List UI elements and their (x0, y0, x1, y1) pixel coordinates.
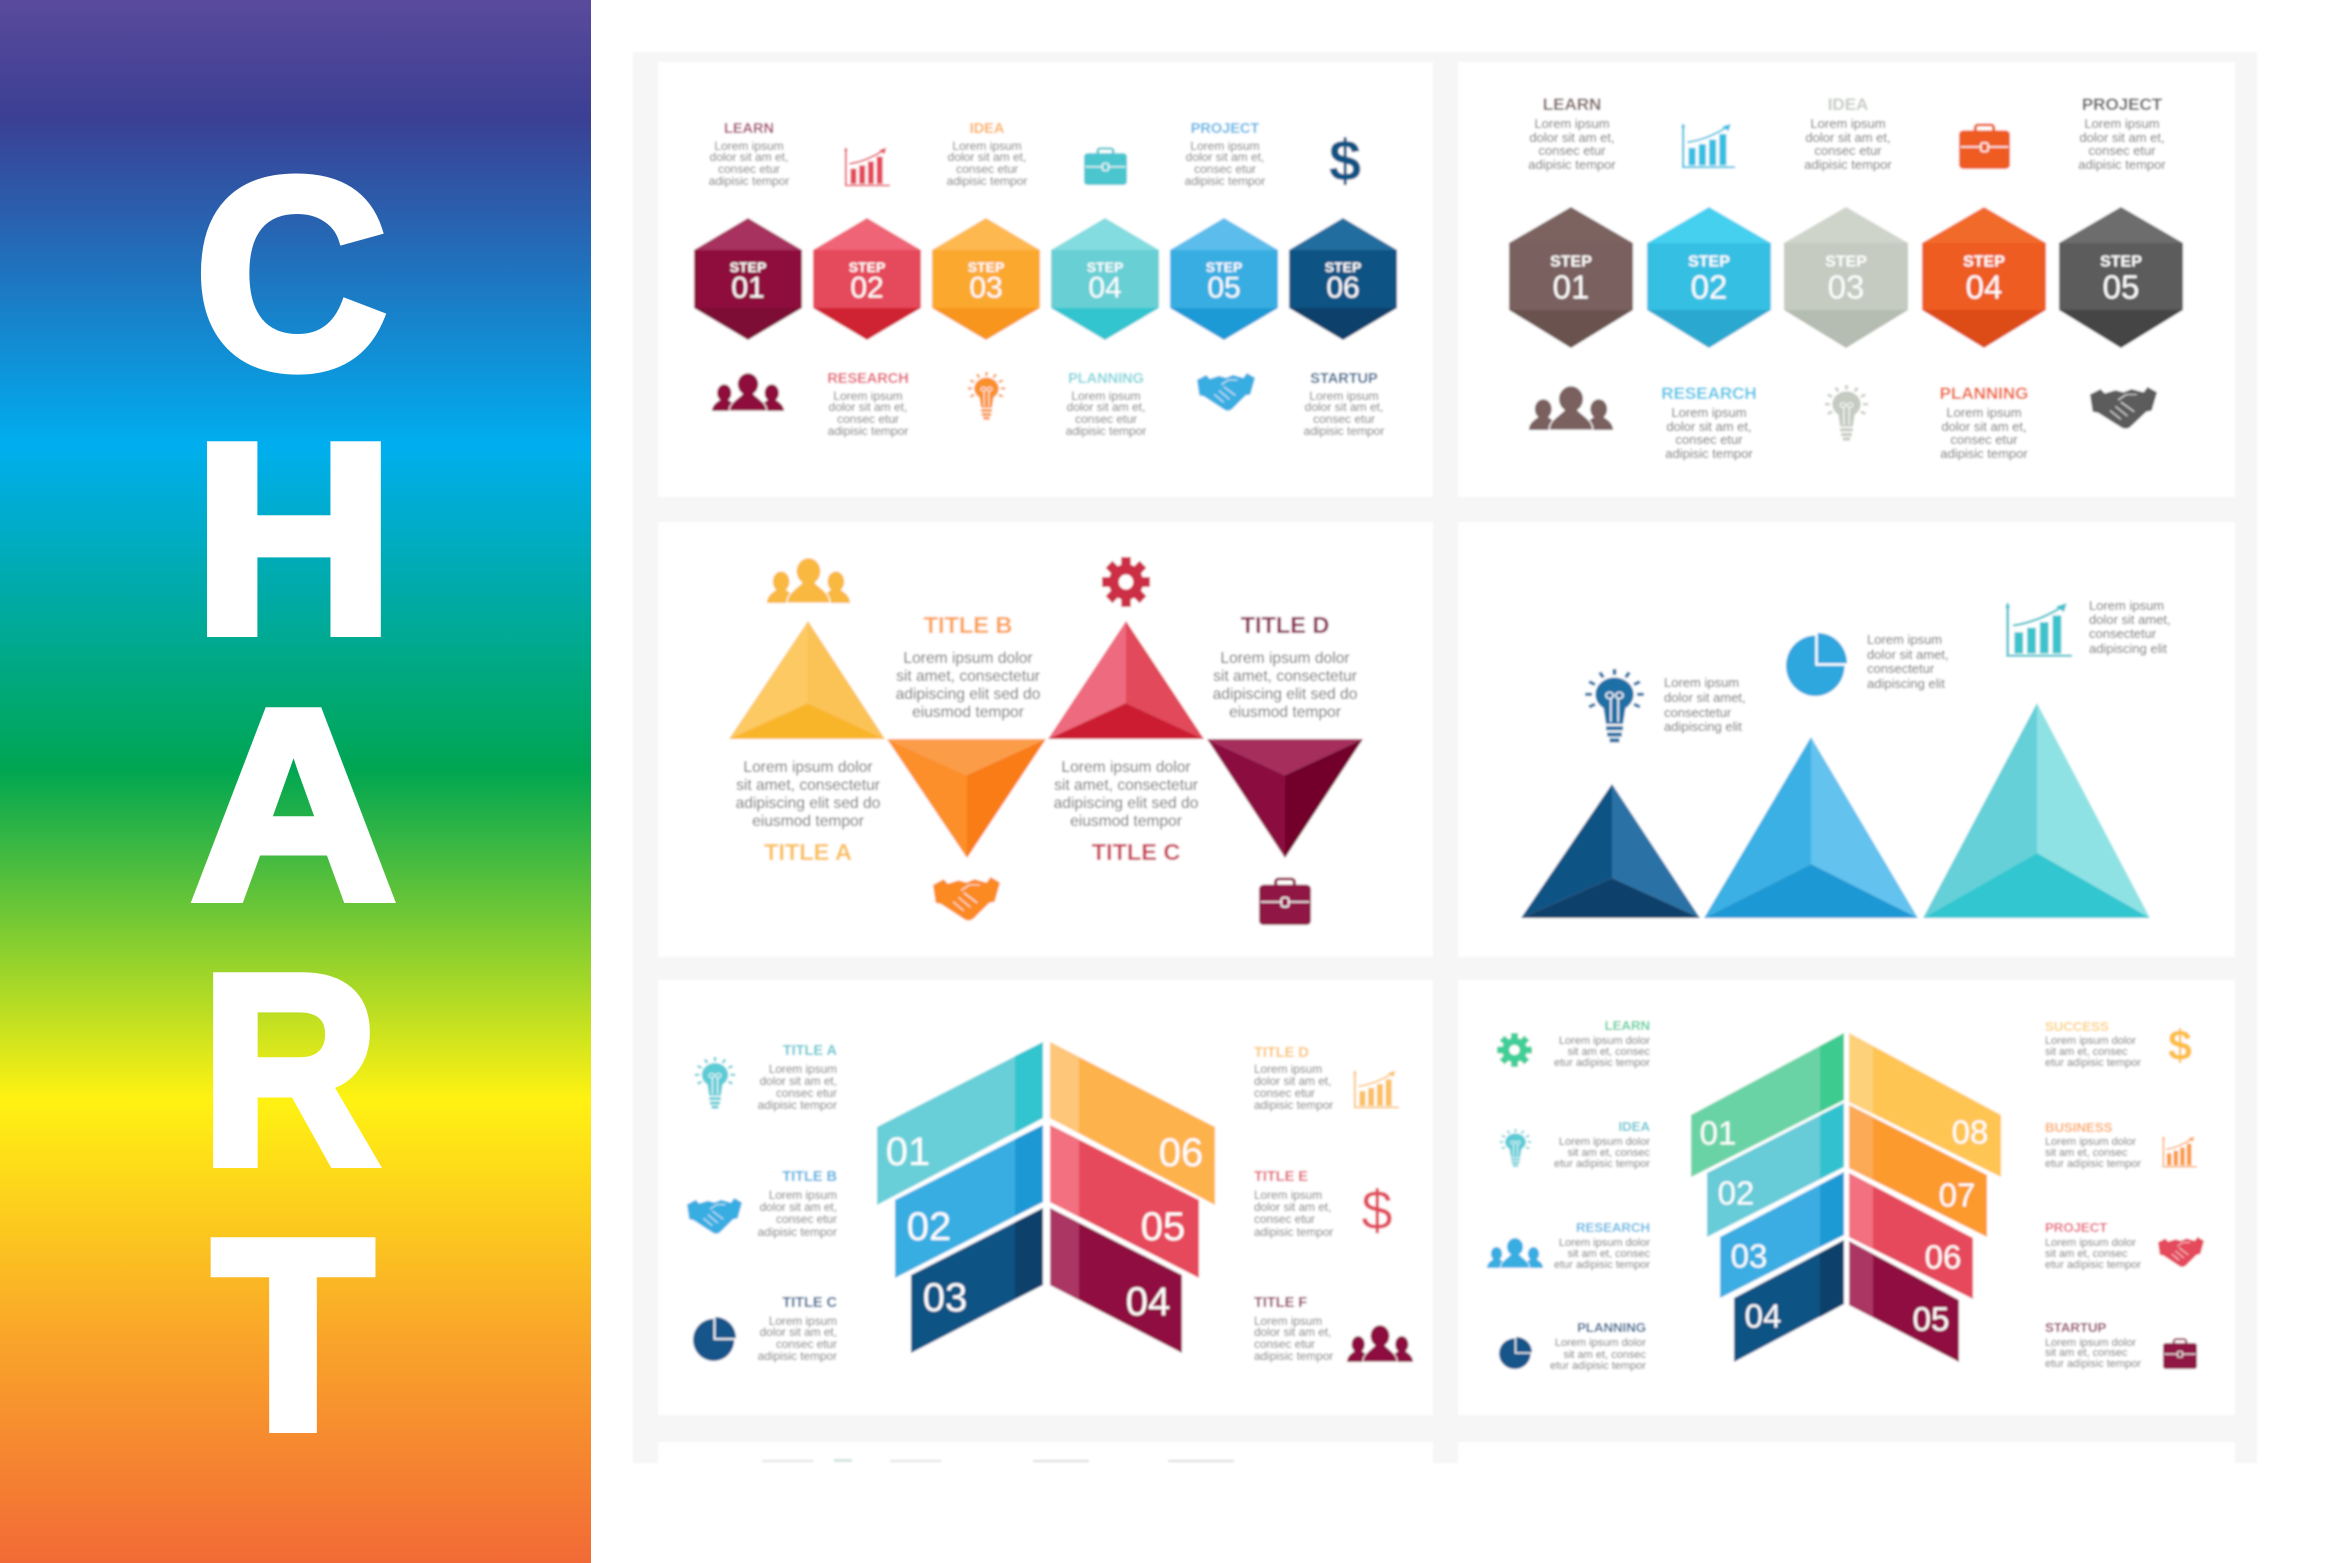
text block 2: Lorem ipsum (1867, 632, 1942, 646)
title: CHART: C (195, 122, 387, 424)
chevron 03 (1720, 1172, 1844, 1298)
chevron 01 (1691, 1033, 1844, 1177)
icon: handshake (687, 1198, 742, 1234)
pyramid large (1923, 703, 2150, 918)
text: PROJECT: dolor sit am et, (2079, 130, 2165, 144)
hexagon step 05 (2059, 207, 2183, 348)
text: BUSINESS: sit am et, consec (2045, 1147, 2128, 1159)
text: IDEA: adipisic tempor (1804, 156, 1892, 172)
text: PLANNING: dolor sit am et, (1941, 418, 2027, 434)
panel: growing pyramids (1458, 522, 2235, 957)
text: IDEA: Lorem ipsum dolor (1559, 1136, 1650, 1148)
text: BUSINESS: BUSINESS (2045, 1120, 2113, 1134)
text: TITLE B: Lorem ipsum (769, 1188, 837, 1202)
chevron 01: 01 (1700, 1114, 1736, 1152)
text: PLANNING: consec etur (1950, 432, 2018, 446)
title: CHART (191, 122, 396, 1486)
hexagon step 04: STEP (1963, 254, 2005, 270)
text: TITLE B: TITLE B (924, 612, 1012, 638)
icon: people (1347, 1325, 1413, 1362)
text: TITLE B: consec etur (776, 1212, 837, 1226)
text: TITLE A: sit amet, consectetur (736, 776, 880, 794)
text: LEARN: dolor sit am et, (1529, 130, 1615, 144)
text: RESEARCH: dolor sit am et, (829, 400, 907, 414)
text block 1: Lorem ipsum (1664, 674, 1739, 690)
panel: six step hexagons (658, 62, 1433, 497)
text: PROJECT: adipisic tempor (1185, 174, 1265, 188)
icon: people (712, 373, 784, 411)
text: TITLE D: dolor sit am et, (1254, 1074, 1331, 1088)
text: TITLE B: sit amet, consectetur (896, 668, 1040, 684)
text: RESEARCH: RESEARCH (1576, 1220, 1650, 1234)
text: LEARN: adipisic tempor (709, 174, 789, 188)
pyramid small (1521, 784, 1700, 918)
text: TITLE F: consec etur (1254, 1337, 1315, 1351)
panel: six chevron arrow (658, 980, 1433, 1415)
text: TITLE A: Lorem ipsum dolor (743, 758, 873, 776)
text block 1: dolor sit amet, (1664, 690, 1746, 704)
text: IDEA: consec etur (956, 162, 1018, 176)
text: TITLE C: dolor sit am et, (760, 1325, 837, 1339)
text: TITLE D: consec etur (1254, 1086, 1315, 1100)
text: IDEA: IDEA (1828, 94, 1868, 114)
text: LEARN: etur adipisic tempor (1554, 1057, 1650, 1069)
text: RESEARCH: dolor sit am et, (1666, 418, 1752, 434)
chevron 05: 05 (1913, 1300, 1949, 1338)
hexagon step 03 (1784, 207, 1908, 348)
text: TITLE B: eiusmod tempor (912, 704, 1024, 720)
chevron 01: 01 (886, 1130, 930, 1174)
rainbow side panel (0, 0, 591, 1563)
text: PLANNING: PLANNING (1577, 1320, 1646, 1334)
text: BUSINESS: Lorem ipsum dolor (2045, 1136, 2136, 1148)
text: STARTUP: adipisic tempor (1304, 424, 1384, 438)
icon: pie (1786, 633, 1847, 696)
text: PLANNING: Lorem ipsum (1071, 389, 1141, 403)
hexagon step 02: STEP (849, 259, 885, 275)
hexagon step 02: 02 (850, 272, 884, 304)
text: PROJECT: consec etur (2088, 142, 2156, 158)
chevron 07: 07 (1939, 1176, 1975, 1214)
text: TITLE C: Lorem ipsum dolor (1061, 758, 1191, 776)
text: RESEARCH: adipisic tempor (828, 424, 908, 438)
text: RESEARCH: Lorem ipsum dolor (1559, 1237, 1650, 1249)
hexagon step 05: STEP (1206, 259, 1242, 275)
text block 2: adipiscing elit (1867, 676, 1945, 690)
text block 1: consectetur (1664, 704, 1732, 720)
hexagon step 03: 03 (969, 272, 1003, 304)
triangle A (729, 621, 885, 739)
text: RESEARCH: RESEARCH (1661, 384, 1757, 402)
text: PROJECT: PROJECT (1191, 121, 1259, 137)
triangle C (1048, 621, 1204, 739)
icon: briefcase (1959, 125, 2010, 169)
pyramid medium (1704, 737, 1918, 918)
text: TITLE C: eiusmod tempor (1070, 812, 1182, 830)
icon: chart (2162, 1136, 2197, 1167)
text: TITLE B: Lorem ipsum dolor (903, 650, 1033, 666)
text: STARTUP: STARTUP (2045, 1320, 2106, 1334)
text: TITLE A: dolor sit am et, (760, 1074, 837, 1088)
text: SUCCESS: SUCCESS (2045, 1018, 2109, 1034)
chevron 06: 06 (1925, 1238, 1961, 1276)
text: TITLE A: TITLE A (783, 1043, 838, 1059)
text: PLANNING: Lorem ipsum dolor (1555, 1337, 1646, 1349)
icon: briefcase (2163, 1339, 2197, 1369)
text block 3: adipiscing elit (2089, 640, 2167, 656)
hexagon step 03 (932, 218, 1040, 340)
text: TITLE B: TITLE B (782, 1169, 837, 1185)
chevron 04 (1050, 1208, 1182, 1353)
text: LEARN: sit am et, consec (1567, 1046, 1650, 1058)
text: RESEARCH: adipisic tempor (1665, 446, 1753, 460)
text: SUCCESS: etur adipisic tempor (2045, 1057, 2141, 1069)
text: IDEA: dolor sit am et, (1805, 130, 1891, 144)
text: PLANNING: PLANNING (1940, 384, 2028, 402)
text: STARTUP: sit am et, consec (2045, 1347, 2128, 1359)
chevron 08: 08 (1952, 1114, 1988, 1150)
text: PROJECT: consec etur (1194, 162, 1256, 176)
chevron 03 (911, 1208, 1043, 1353)
icon: bulb (968, 372, 1005, 420)
text: SUCCESS: Lorem ipsum dolor (2045, 1035, 2136, 1047)
text: LEARN: Lorem ipsum (714, 139, 784, 153)
panels: cropped next row (658, 1442, 2235, 1463)
text: PROJECT: dolor sit am et, (1186, 150, 1264, 164)
icon: chart (844, 147, 890, 185)
chevron 08 (1849, 1033, 2001, 1177)
text: PLANNING: Lorem ipsum (1946, 404, 2022, 420)
text: STARTUP: etur adipisic tempor (2045, 1358, 2141, 1370)
icon: handshake (2158, 1237, 2204, 1267)
text: IDEA: etur adipisic tempor (1554, 1158, 1650, 1170)
text: TITLE D: adipisic tempor (1254, 1098, 1333, 1112)
icon: briefcase (1084, 149, 1127, 185)
text: RESEARCH: consec etur (1675, 432, 1743, 446)
chevron 06 (1050, 1042, 1215, 1205)
text: TITLE A: TITLE A (764, 839, 852, 865)
text: TITLE D: eiusmod tempor (1229, 704, 1341, 720)
text: PROJECT: Lorem ipsum dolor (2045, 1237, 2136, 1249)
text: PROJECT: sit am et, consec (2045, 1248, 2128, 1260)
chevron 01 (877, 1042, 1043, 1205)
text: IDEA: adipisic tempor (947, 174, 1027, 188)
text: SUCCESS: sit am et, consec (2045, 1046, 2128, 1058)
hexagon step 05: 05 (1207, 272, 1241, 304)
text: RESEARCH: RESEARCH (827, 371, 909, 387)
hexagon step 02: STEP (1688, 254, 1730, 270)
chevron 07 (1849, 1105, 1987, 1237)
text: IDEA: Lorem ipsum (1810, 116, 1886, 130)
chevron 05: 05 (1141, 1205, 1185, 1249)
text: PROJECT: Lorem ipsum (2084, 116, 2160, 130)
text: LEARN: Lorem ipsum dolor (1559, 1035, 1650, 1047)
chevron 04 (1734, 1240, 1844, 1362)
hexagon step 02: 02 (1691, 268, 1727, 306)
text: IDEA: IDEA (1618, 1118, 1650, 1134)
text: RESEARCH: Lorem ipsum (833, 389, 903, 403)
text: LEARN: consec etur (718, 162, 780, 176)
text: LEARN: dolor sit am et, (710, 150, 788, 164)
chevron 03: 03 (1731, 1238, 1767, 1274)
triangle D (1207, 739, 1363, 858)
icon: briefcase (1259, 879, 1311, 925)
chevron 06: 06 (1159, 1131, 1203, 1175)
hexagon step 05: STEP (2100, 254, 2142, 270)
text: TITLE C: consec etur (776, 1337, 837, 1351)
icon: chart (1353, 1070, 1399, 1107)
text: TITLE C: TITLE C (782, 1295, 838, 1311)
icon: handshake (2090, 387, 2157, 429)
hexagon step 04: 04 (1966, 268, 2002, 306)
text: LEARN: adipisic tempor (1528, 156, 1616, 172)
hexagon step 01: 01 (1553, 268, 1589, 306)
hexagon step 03: 03 (1828, 268, 1864, 306)
hexagon step 06: 06 (1326, 272, 1360, 304)
icon: gear (1102, 557, 1150, 607)
chevron 02: 02 (907, 1205, 951, 1249)
chevron 05 (1050, 1125, 1199, 1278)
hexagon step 02 (1647, 207, 1771, 348)
text: TITLE C: sit amet, consectetur (1054, 776, 1198, 794)
chevron 02 (1707, 1103, 1844, 1237)
text: PROJECT: PROJECT (2082, 94, 2163, 114)
text block 1: adipiscing elit (1664, 718, 1742, 734)
chevron 02: 02 (1718, 1174, 1754, 1212)
text: STARTUP: STARTUP (1310, 371, 1378, 387)
chevron 05 (1849, 1241, 1959, 1362)
hexagon step 04: 04 (1088, 272, 1122, 304)
hexagon step 01 (1509, 207, 1633, 348)
chevron 06 (1849, 1173, 1973, 1299)
hexagon step 05: 05 (2103, 268, 2139, 306)
text: LEARN: consec etur (1538, 142, 1606, 158)
text: LEARN: LEARN (1605, 1018, 1650, 1032)
hexagon step 06 (1289, 218, 1397, 340)
text: TITLE D: Lorem ipsum (1254, 1062, 1322, 1076)
panel: alternating triangles (658, 522, 1433, 957)
text: PLANNING: consec etur (1075, 412, 1137, 426)
text: TITLE E: dolor sit am et, (1254, 1200, 1331, 1214)
text: PLANNING: adipisic tempor (1066, 424, 1146, 438)
text: RESEARCH: etur adipisic tempor (1554, 1259, 1650, 1271)
text: TITLE E: adipisic tempor (1254, 1225, 1333, 1239)
text: STARTUP: dolor sit am et, (1305, 400, 1383, 414)
text: TITLE A: eiusmod tempor (752, 812, 864, 830)
hexagon step 01: STEP (1550, 254, 1592, 270)
triangle B (887, 739, 1046, 858)
panel: five step hexagons (1458, 62, 2235, 497)
text: TITLE A: Lorem ipsum (769, 1062, 837, 1076)
text: TITLE C: adipisic tempor (758, 1349, 837, 1363)
hexagon step 04: STEP (1087, 259, 1123, 275)
text: RESEARCH: sit am et, consec (1567, 1248, 1650, 1260)
text: TITLE A: consec etur (776, 1086, 837, 1100)
chevron 03: 03 (923, 1276, 967, 1320)
title: CHART: T (213, 1184, 373, 1486)
chevron 04: 04 (1745, 1298, 1781, 1334)
text: LEARN: LEARN (1543, 94, 1601, 114)
text block 3: consectetur (2089, 626, 2157, 640)
hexagon step 04 (1051, 218, 1159, 340)
text: TITLE C: adipiscing elit sed do (1054, 794, 1199, 812)
icon: gear (1497, 1033, 1532, 1067)
icon: bulb (1500, 1129, 1531, 1167)
text: STARTUP: Lorem ipsum (1309, 389, 1379, 403)
text block 2: dolor sit amet, (1867, 646, 1949, 662)
text: TITLE E: consec etur (1254, 1212, 1315, 1226)
text: IDEA: consec etur (1814, 142, 1882, 158)
icon: handshake (1197, 373, 1255, 411)
text: TITLE D: TITLE D (1254, 1045, 1309, 1061)
icon: dollar: $ (1329, 128, 1361, 194)
icon: dollar: $ (2168, 1022, 2192, 1070)
text: PROJECT: etur adipisic tempor (2045, 1259, 2141, 1271)
title: CHART: A (191, 653, 396, 956)
hexagon step 01 (694, 218, 802, 340)
text block 2: consectetur (1867, 660, 1935, 676)
icon: bulb (1585, 669, 1644, 742)
text: STARTUP: Lorem ipsum dolor (2045, 1337, 2136, 1349)
text: TITLE C: TITLE C (1092, 839, 1180, 865)
text: PLANNING: sit am et, consec (1563, 1349, 1646, 1361)
text: PROJECT: adipisic tempor (2078, 156, 2166, 172)
text: TITLE A: adipisic tempor (758, 1098, 837, 1112)
text: TITLE C: Lorem ipsum (769, 1314, 837, 1328)
text: TITLE E: Lorem ipsum (1254, 1188, 1322, 1202)
text: TITLE D: sit amet, consectetur (1213, 668, 1357, 684)
title: CHART: H (194, 389, 394, 690)
hexagon step 03: STEP (968, 259, 1004, 275)
hexagon step 06: STEP (1325, 259, 1361, 275)
icon: chart (1681, 123, 1735, 167)
hexagon step 01: 01 (731, 272, 765, 304)
icon: people (767, 558, 850, 603)
text: IDEA: IDEA (970, 121, 1005, 137)
text: TITLE F: dolor sit am et, (1254, 1325, 1331, 1339)
text: IDEA: dolor sit am et, (948, 150, 1026, 164)
icon: pie (693, 1317, 736, 1361)
text: PLANNING: PLANNING (1068, 371, 1144, 387)
text: PLANNING: dolor sit am et, (1067, 400, 1145, 414)
chevron 02 (895, 1125, 1043, 1278)
text: LEARN: LEARN (724, 121, 774, 137)
text: TITLE F: adipisic tempor (1254, 1349, 1333, 1363)
icon: bulb (1825, 385, 1868, 441)
text: IDEA: Lorem ipsum (952, 139, 1022, 153)
text: TITLE D: adipiscing elit sed do (1213, 686, 1358, 702)
icon: bulb (695, 1057, 735, 1109)
icon: dollar: $ (1361, 1178, 1393, 1242)
template gallery (633, 52, 2257, 1463)
hexagon step 05 (1170, 218, 1278, 340)
hexagon step 02 (813, 218, 921, 340)
hexagon step 01: STEP (730, 259, 766, 275)
text: TITLE E: TITLE E (1254, 1169, 1308, 1185)
text: STARTUP: consec etur (1313, 412, 1375, 426)
text: TITLE B: dolor sit am et, (760, 1200, 837, 1214)
icon: pie (1499, 1337, 1532, 1369)
text: RESEARCH: consec etur (837, 412, 899, 426)
title: CHART: R (201, 918, 379, 1221)
text: TITLE D: Lorem ipsum dolor (1220, 650, 1350, 666)
text: TITLE F: TITLE F (1254, 1295, 1307, 1311)
text: PLANNING: adipisic tempor (1940, 446, 2028, 460)
text: BUSINESS: etur adipisic tempor (2045, 1158, 2141, 1170)
text block 3: dolor sit amet, (2089, 612, 2171, 626)
text: TITLE F: Lorem ipsum (1254, 1314, 1322, 1328)
icon: people (1529, 386, 1613, 430)
text: PROJECT: Lorem ipsum (1190, 139, 1260, 153)
text: IDEA: sit am et, consec (1567, 1147, 1650, 1159)
hexagon step 04 (1922, 207, 2046, 348)
icon: handshake (933, 877, 1000, 920)
panel: eight chevron arrow (1458, 980, 2235, 1415)
text: LEARN: Lorem ipsum (1534, 116, 1610, 130)
icon: chart (2005, 602, 2072, 656)
text: TITLE B: adipiscing elit sed do (896, 686, 1041, 702)
icon: people (1487, 1238, 1543, 1268)
text: RESEARCH: Lorem ipsum (1671, 404, 1747, 420)
text: TITLE D: TITLE D (1241, 612, 1329, 638)
text: TITLE A: adipiscing elit sed do (736, 794, 881, 812)
text block 3: Lorem ipsum (2089, 598, 2164, 612)
chevron 04: 04 (1126, 1280, 1170, 1324)
text: TITLE B: adipisic tempor (758, 1225, 837, 1239)
text: PLANNING: etur adipisic tempor (1550, 1360, 1646, 1372)
text: PROJECT: PROJECT (2045, 1220, 2107, 1234)
hexagon step 03: STEP (1825, 254, 1867, 270)
